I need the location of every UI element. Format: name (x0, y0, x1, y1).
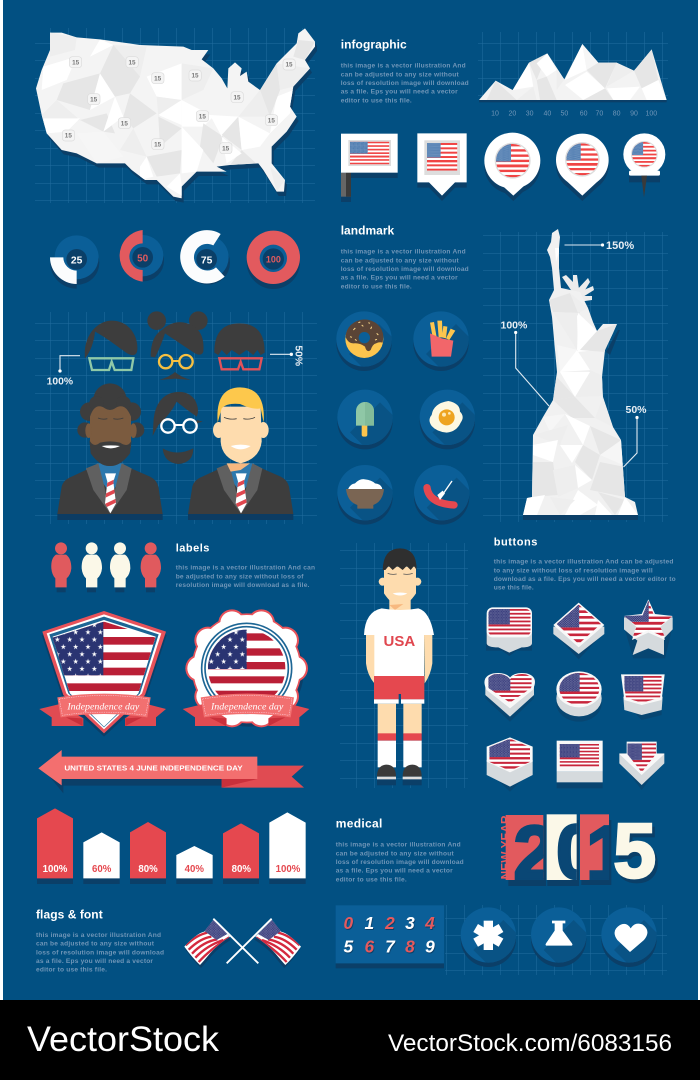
blond man (188, 387, 293, 520)
text block: medical: loss of resolution image will download (336, 859, 464, 866)
button: arrow (619, 742, 664, 790)
statue of liberty low-poly (500, 225, 647, 520)
round seal badge: Independence day (210, 701, 283, 711)
text block: flags & font: as a file. Eps you will need a vector (36, 958, 153, 965)
arrow banner (38, 750, 304, 793)
text block: landmark: editor to use this file. (341, 283, 412, 290)
text block: flags & font: can be adjusted to any size without (36, 941, 155, 948)
figure 4 (141, 542, 161, 592)
callout 50% (624, 404, 647, 467)
new year 2015: 1 (586, 811, 629, 896)
chart axis labels: 20 (508, 110, 516, 117)
text block: flags & font: editor to use this file. (36, 967, 107, 974)
text block: infographic (341, 63, 469, 104)
heading: infographic: infographic (341, 37, 407, 51)
icon: popsicle (337, 390, 408, 461)
button: hexagon (487, 737, 533, 792)
new year 2015: 5 (613, 809, 656, 894)
text block: landmark: loss of resolution image will download (341, 266, 469, 273)
icon: sausage and fork (414, 465, 485, 536)
crossed flags (184, 919, 301, 968)
text block: labels (176, 565, 315, 589)
hair and red glasses (214, 323, 265, 369)
button: heart (484, 673, 535, 722)
callout 50%: 50% (626, 404, 647, 416)
button: diamond (553, 603, 604, 659)
text block: infographic: can be adjusted to any size without (341, 71, 459, 78)
button: speech (486, 607, 532, 656)
text block: infographic: editor to use this file. (341, 97, 412, 104)
bar 100%: 100% (43, 864, 68, 875)
callout 100% (500, 320, 549, 406)
map markers: 15 (233, 94, 241, 101)
arrow banner: UNITED STATES 4 JUNE INDEPENDENCE DAY (64, 764, 243, 773)
text block: buttons (494, 559, 676, 592)
hair, yellow glasses and moustache (147, 311, 208, 380)
chart axis labels: 70 (595, 110, 603, 117)
new year 2015: NEW YEAR (498, 815, 512, 879)
heading: medical: medical (336, 816, 382, 830)
number panel: 1 (365, 913, 374, 933)
donut 100 (247, 231, 300, 289)
bar 60%: 60% (92, 864, 112, 875)
right flag (254, 920, 301, 968)
icon: bowl of rice (337, 465, 408, 536)
hair and teal glasses (85, 321, 137, 370)
USA low-poly map (33, 27, 320, 203)
area chart (479, 44, 667, 116)
map markers: 15 (128, 59, 136, 66)
heading: landmark: landmark (341, 223, 395, 237)
text block: flags & font: loss of resolution image will download (36, 949, 164, 956)
pin: square flag (417, 133, 467, 201)
number panel: 8 (405, 936, 415, 956)
map markers (62, 57, 295, 154)
bar 80% (223, 823, 259, 878)
bar 80% (130, 822, 166, 878)
donut charts (50, 230, 300, 289)
callout 100%: 100% (47, 376, 73, 387)
button: circle (556, 671, 602, 722)
soccer player: USA (384, 633, 415, 650)
man with dark skin (57, 383, 163, 520)
text block: infographic: as a file. Eps you will need a vector (341, 89, 458, 96)
medical icons (461, 907, 672, 978)
callout 150%: 150% (606, 240, 634, 252)
chart axis labels (491, 110, 657, 117)
donut 50: 50 (137, 254, 149, 265)
figure 3 (110, 542, 130, 592)
number panel: 6 (365, 936, 375, 956)
text block: buttons: this image is a vector illustration And can be adjusted (494, 559, 673, 566)
number panel (336, 905, 444, 968)
callout 50% (270, 345, 304, 366)
hipster hair, glasses and beard (153, 392, 203, 464)
text block: landmark: this image is a vector illustration And (341, 249, 466, 256)
text block: buttons: download as a file. Eps you will need a vector editor to (494, 576, 676, 583)
map markers: 15 (199, 113, 206, 120)
figure 1 (51, 542, 71, 592)
text block: medical: this image is a vector illustration And (336, 842, 461, 849)
heading: labels: labels (176, 543, 209, 555)
new year 2015 (501, 814, 658, 886)
text block: medical: can be adjusted to any size without (336, 850, 454, 857)
bar 80%: 80% (232, 864, 251, 875)
text block: infographic: this image is a vector illustration And (341, 63, 466, 70)
shield badge: Independence day (66, 701, 139, 711)
number panel: 9 (425, 936, 435, 956)
chart axis labels: 80 (613, 110, 621, 117)
map markers: 15 (191, 73, 199, 80)
icon: donut (336, 311, 407, 382)
number panel: 0 (344, 913, 354, 933)
chart axis labels: 10 (491, 110, 499, 117)
button: shield (621, 674, 665, 720)
new year 2015: 0 (556, 811, 599, 896)
text block: flags & font (36, 932, 164, 974)
pin: round flag large (484, 133, 540, 201)
button: rectangle (557, 741, 603, 788)
callout 50%: 50% (293, 345, 304, 366)
text block: labels: this image is a vector illustration And can (176, 565, 315, 572)
footer bar (0, 1000, 700, 1080)
bar 40% (176, 846, 213, 878)
bar 80%: 80% (138, 864, 158, 875)
map markers: 15 (90, 96, 98, 103)
soccer player (364, 548, 434, 785)
text block: infographic: loss of resolution image will download (341, 80, 469, 87)
bar chart (37, 808, 306, 884)
callout 150% (564, 240, 634, 252)
pin: round push pin (623, 133, 665, 197)
pictogram people (51, 542, 161, 592)
round seal badge (183, 609, 309, 729)
text block: labels: be adjusted to any size without loss of (176, 573, 304, 580)
donut 25: 25 (71, 256, 83, 267)
text block: medical (336, 842, 464, 883)
number panel: 7 (385, 936, 396, 956)
chart axis labels: 90 (630, 110, 638, 117)
chart axis labels: 40 (543, 110, 551, 117)
heading: buttons: buttons (494, 536, 537, 548)
shield badge (39, 611, 167, 737)
bar 100% (269, 812, 306, 878)
pin: round flag medium (556, 134, 609, 201)
text block: medical: as a file. Eps you will need a vector (336, 868, 453, 875)
button: star (624, 599, 673, 658)
chart axis labels: 50 (560, 110, 568, 117)
icon: fries (413, 311, 484, 382)
map markers: 15 (222, 145, 230, 152)
bar 100% (37, 808, 73, 878)
new year 2015: 2 (513, 811, 556, 896)
bar 40%: 40% (185, 864, 204, 875)
number panel: 5 (344, 936, 354, 956)
bar 60% (83, 832, 120, 878)
icon: flask (531, 907, 602, 978)
people illustrations (47, 311, 304, 592)
donut 100: 100 (266, 254, 281, 264)
footer bar: VectorStock (27, 1020, 220, 1059)
callout 100%: 100% (500, 320, 528, 332)
map markers: 15 (121, 120, 128, 127)
chart axis labels: 100 (646, 110, 657, 117)
left flag (184, 920, 231, 968)
text block: flags & font: this image is a vector illustration And (36, 932, 161, 939)
text block: buttons: to any size without loss of resolution image will (494, 567, 653, 574)
text block: landmark: can be adjusted to any size without (341, 257, 459, 264)
number panel: 4 (424, 913, 435, 933)
bar 100%: 100% (276, 864, 301, 875)
footer bar: VectorStock.com/6083156 (388, 1030, 672, 1057)
pin: pole flag (341, 134, 398, 202)
new year 2015: 5 (616, 814, 659, 899)
flag pins row (341, 133, 665, 202)
text block: landmark (341, 249, 469, 290)
badges and banner (38, 609, 309, 793)
flag buttons (484, 599, 673, 792)
map markers: 15 (268, 117, 275, 124)
grid panels (35, 28, 668, 975)
map markers: 15 (154, 141, 162, 148)
text block: labels: resolution image will download as a file. (176, 582, 310, 589)
heading: flags & font: flags & font (36, 907, 103, 921)
text block: medical: editor to use this file. (336, 876, 407, 883)
donut 75: 75 (201, 256, 213, 267)
text block: buttons: use this file. (494, 585, 534, 592)
map markers: 15 (72, 59, 80, 66)
text block: landmark: as a file. Eps you will need a vector (341, 275, 458, 282)
crown spikes (562, 275, 594, 302)
food icons (336, 311, 491, 536)
map markers: 15 (154, 75, 162, 82)
callout 100% (47, 356, 80, 387)
chart axis labels: 60 (580, 110, 588, 117)
donut 25 (50, 235, 99, 289)
map markers: 15 (65, 133, 72, 140)
icon: heart (601, 907, 672, 978)
donut 50 (120, 230, 164, 282)
icon: asterisk (461, 907, 532, 978)
number panel: 2 (384, 913, 395, 933)
map markers: 15 (285, 62, 293, 69)
number panel: 3 (405, 913, 415, 933)
donut 75 (180, 230, 230, 285)
chart axis labels: 30 (526, 110, 534, 117)
icon: egg (420, 390, 491, 461)
figure 2 (82, 542, 102, 592)
